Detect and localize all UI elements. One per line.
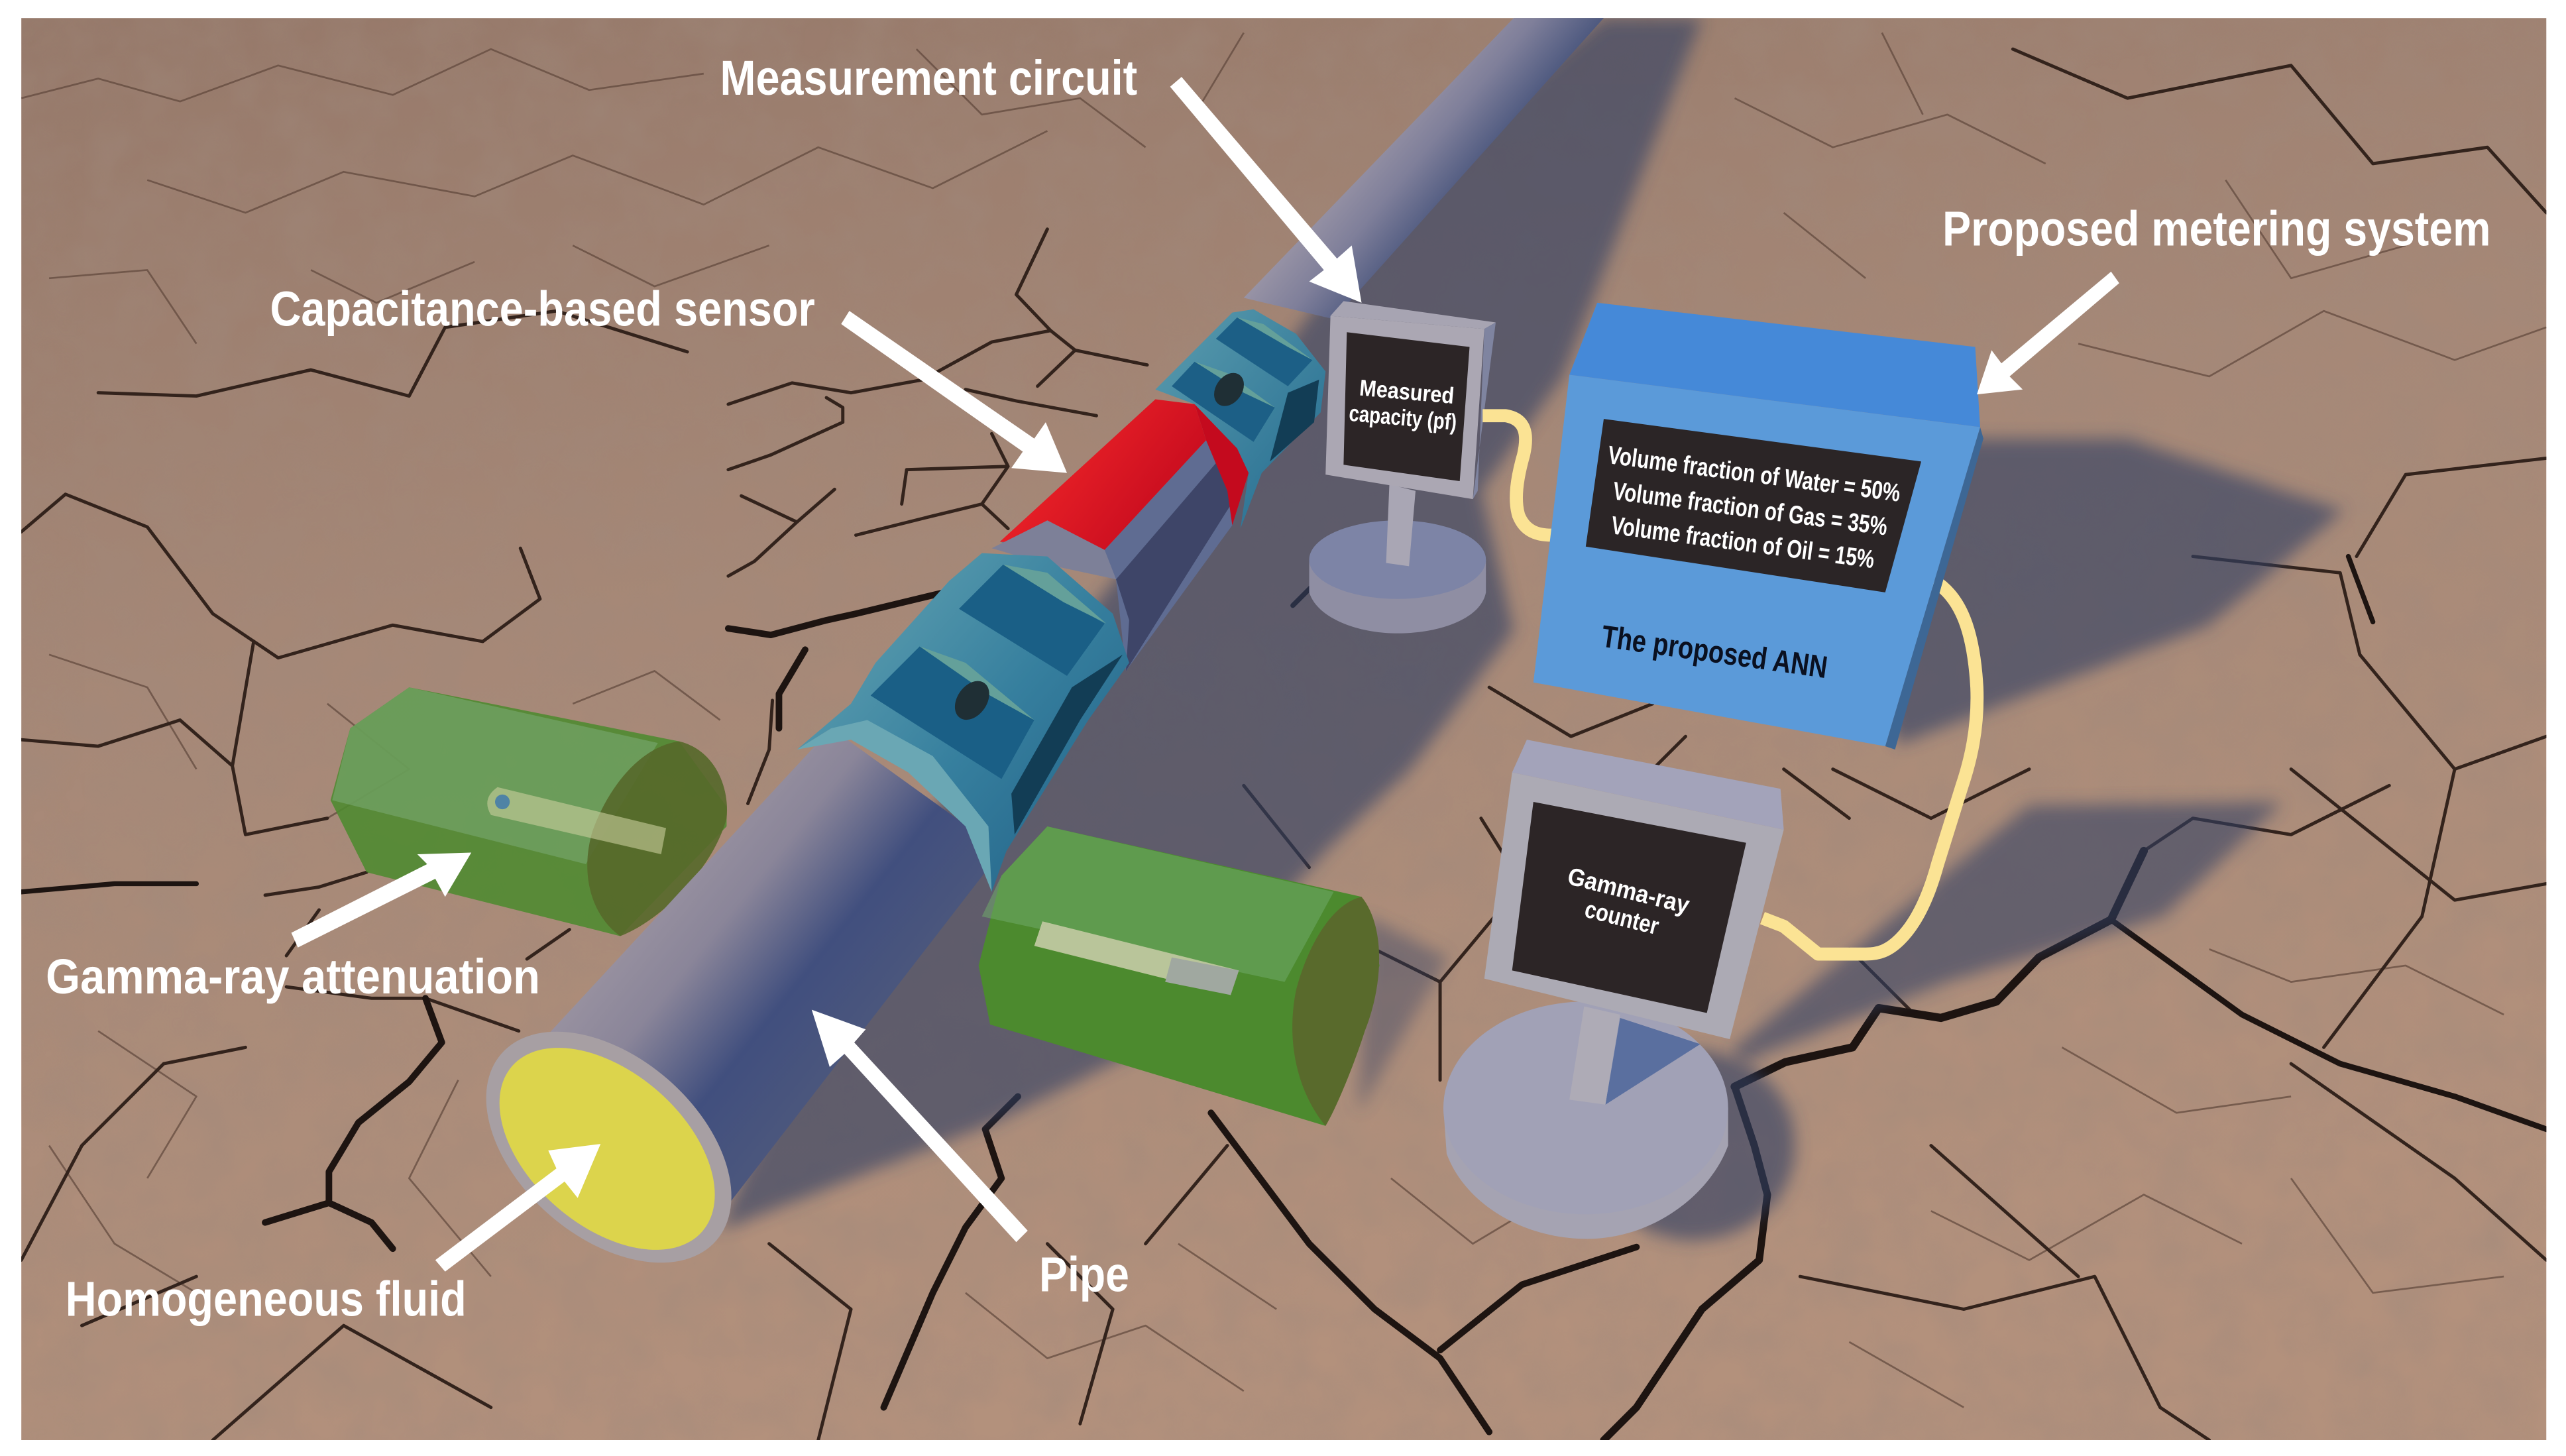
stand shadow [1605,1018,1701,1105]
sign screen [1512,802,1746,1013]
cylinder highlight band [332,687,658,864]
homogeneous fluid: yellow face [462,1008,753,1290]
sign top face [1512,740,1784,830]
upper flange recess 2 [1172,362,1275,442]
lower flange bolt [948,675,996,726]
sensor: far electrode [1195,404,1249,526]
detector end [1165,958,1239,995]
upper flange wedge 2 [1195,362,1275,408]
box front face [1534,374,1980,746]
sign top face [1331,301,1496,329]
box top face [1569,303,1980,427]
sign text: capacity (pf) [1348,401,1458,435]
label: homogeneous fluid: Homogeneous fluid [66,1271,467,1326]
upper flange right recess [1270,380,1319,461]
label: measurement circuit: Measurement circuit [720,50,1137,105]
pipe middle: shaded face [1116,463,1232,671]
gamma-ray source dot [495,795,510,809]
upper flange bolt [1208,367,1250,412]
arrow: homogeneous fluid [435,1144,600,1272]
lower flange collar [797,720,991,892]
flange: upper [1121,309,1325,529]
box side [1885,427,1983,750]
shadow: gamma-ray counter cast shadow [1735,802,2283,1064]
label: capacitance-based sensor: Capacitance-based sensor [270,281,815,336]
sign front frame [1484,773,1784,1039]
sign side face [1473,322,1496,499]
base disc top [1443,1001,1728,1214]
left gamma-ray attenuation cylinder [331,687,727,936]
wire: measurement circuit to ANN [1482,416,1551,535]
upper flange recess 1 [1216,317,1312,386]
ANN output values: Volume fraction of Oil = 15% [1610,511,1876,574]
label: gamma-ray attenuation: Gamma-ray attenuation [46,949,540,1004]
arrow: gamma-ray attenuation [292,853,471,948]
sign text: Gamma-ray [1565,862,1693,919]
sensor: grey rim [991,520,1116,579]
lower flange wedge 1 [1003,565,1106,624]
proposed ANN box [1534,303,1983,750]
lower flange recess 2 [871,646,1034,779]
arrow: pipe [812,1010,1028,1242]
gamma-ray counter sign [1443,740,1784,1239]
upper flange wedge 1 [1237,317,1312,360]
sign text [1348,375,1460,435]
arrow: proposed metering system [1977,272,2119,394]
sign front frame [1325,316,1484,499]
ANN output values: Volume fraction of Water = 50% [1606,441,1902,508]
shadow: ANN box cast shadow [1866,439,2343,745]
wire: ANN to gamma-ray counter [1763,581,1977,954]
pipe: open end rim [442,986,775,1308]
stem [1569,1007,1620,1105]
shadow: right cylinder [1359,917,1448,1113]
shadow: gamma-ray counter base [1592,1050,1795,1241]
measurement circuit sign [1310,301,1496,634]
base disc top [1310,520,1486,599]
ANN output values [1606,441,1902,574]
capacitance sensor: red electrode [991,400,1249,579]
ANN screen [1586,419,1921,592]
sign text [1558,862,1693,946]
gamma-ray beam [487,787,666,854]
label: proposed metering system: Proposed metering system [1942,201,2490,256]
shadow: pipe cast shadow [720,18,1702,1231]
stem [1386,484,1416,566]
gamma-ray beam [1034,921,1239,995]
pipe: upper section [1244,18,1604,319]
sign screen [1343,332,1470,481]
label: pipe: Pipe [1039,1247,1129,1302]
ANN caption: The proposed ANN [1600,619,1830,685]
right gamma-ray detector cylinder [979,826,1380,1126]
cylinder end cap [587,742,727,936]
lower flange right recess [1011,655,1123,834]
pipe: lower section [527,728,1001,1211]
cylinder highlight band [982,826,1334,982]
pipe: middle section [1000,440,1249,671]
sign text: Measured [1359,376,1455,409]
lower flange recess 1 [959,565,1105,676]
sign text: counter [1582,895,1662,940]
base disc side [1310,560,1486,634]
arrow: measurement circuit [1170,77,1362,303]
base disc side [1443,1108,1728,1239]
lower flange wedge 2 [920,646,1034,720]
ANN output values: Volume fraction of Gas = 35% [1611,476,1889,541]
flange: lower [797,553,1129,892]
cylinder end cap [1292,897,1379,1126]
arrow: capacitance-based sensor [841,311,1067,473]
